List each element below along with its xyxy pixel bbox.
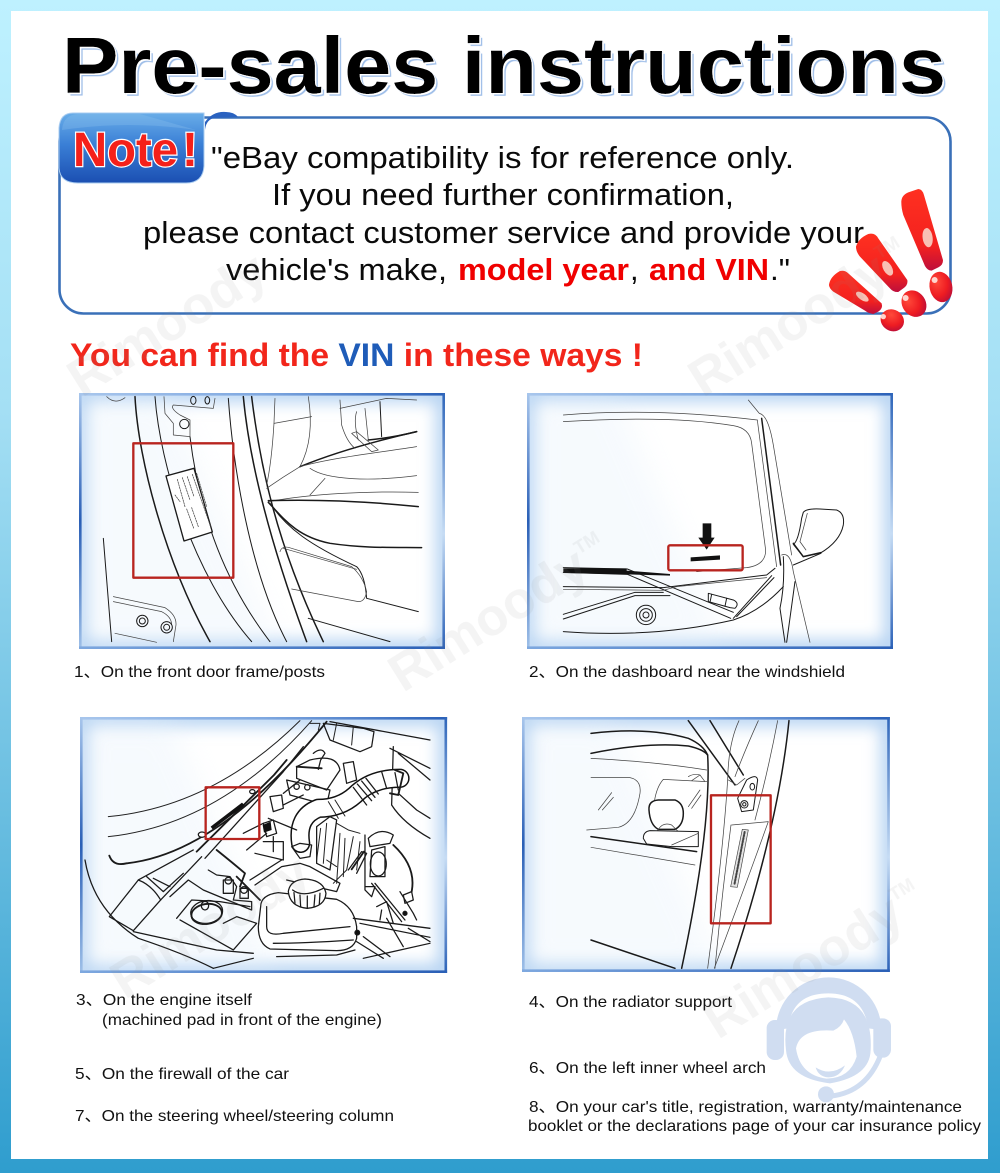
- line drawing: engine bay: [85, 721, 430, 968]
- note text: .": [770, 252, 790, 287]
- caption 8: booklet or the declarations page of your car insurance policy: [528, 1118, 981, 1135]
- watermarks: TM: [885, 874, 918, 905]
- panel: engine location: [80, 717, 447, 973]
- VIN strip: [731, 829, 748, 887]
- caption 3: [76, 992, 382, 1029]
- note text: please contact customer service and provide your: [143, 215, 864, 250]
- image frame: [522, 717, 890, 972]
- icon: customer service headset: [767, 977, 891, 1102]
- watermarks: Rimoody: [379, 536, 598, 703]
- caption 1: 1、On the front door frame/posts: [74, 664, 325, 681]
- note text: ,: [630, 252, 639, 287]
- watermarks: [58, 227, 935, 1050]
- panel: radiator support location: [522, 717, 890, 972]
- red highlight box: [206, 787, 259, 839]
- panel: dashboard location: [527, 393, 893, 649]
- round cap: [189, 899, 224, 925]
- image frame: [80, 717, 447, 973]
- intake hose: [300, 778, 400, 843]
- watermarks: Rimoody: [101, 843, 320, 1010]
- cables: [217, 850, 260, 900]
- note panel: [59, 112, 955, 336]
- pillar: [731, 721, 789, 968]
- caption 2: 2、On the dashboard near the windshield: [529, 664, 845, 681]
- arrow: [698, 523, 715, 550]
- image frame: [79, 393, 445, 649]
- watermarks: Rimoody: [58, 241, 277, 408]
- line drawing: door frame: [103, 396, 422, 642]
- red highlight box: [711, 795, 771, 923]
- line drawing: radiator support: [587, 721, 789, 968]
- note text: model year: [458, 252, 629, 287]
- hinge: [738, 777, 758, 812]
- note text: [143, 140, 864, 287]
- caption 8: [528, 1099, 981, 1135]
- red highlight box: [668, 545, 743, 570]
- title: Pre-sales instructions: [62, 21, 946, 110]
- caption 6: 6、On the left inner wheel arch: [529, 1060, 766, 1077]
- strut: [688, 721, 735, 785]
- caption 4: 4、On the radiator support: [529, 994, 733, 1011]
- note text: If you need further confirmation,: [272, 177, 734, 212]
- image frame: [527, 393, 893, 649]
- note text: and VIN: [649, 252, 769, 287]
- panel: door frame location: [79, 393, 445, 649]
- note badge: [59, 112, 238, 183]
- caption 8: 8、On your car's title, registration, warranty/maintenance: [529, 1099, 962, 1116]
- caption 7: 7、On the steering wheel/steering column: [75, 1108, 394, 1125]
- icon: red exclamation marks: [829, 189, 955, 336]
- VIN plate: [166, 468, 212, 541]
- note text: vehicle's make,: [226, 252, 447, 287]
- line drawing: windshield: [563, 400, 844, 642]
- note text: "eBay compatibility is for reference only.: [211, 140, 794, 175]
- watermarks: TM: [870, 232, 903, 263]
- caption 3: 3、On the engine itself: [76, 992, 253, 1009]
- caption 5: 5、On the firewall of the car: [75, 1066, 290, 1083]
- subheading: You can find the VIN in these ways !: [70, 337, 643, 373]
- red highlight box: [133, 443, 233, 578]
- caption 3: (machined pad in front of the engine): [102, 1012, 382, 1029]
- sensor cluster: [368, 832, 393, 877]
- dipstick and pipes: [352, 852, 364, 869]
- watermarks: Rimoody: [679, 241, 898, 408]
- watermarks: Rimoody: [694, 883, 913, 1050]
- note badge: !: [182, 124, 198, 177]
- note box outline: [60, 118, 950, 314]
- pad pins: [250, 790, 255, 794]
- reservoir: [258, 893, 357, 951]
- note badge: Note: [73, 124, 178, 177]
- bottle and cap: [297, 758, 340, 790]
- watermarks: TM: [570, 527, 603, 558]
- VIN plate mark: [691, 555, 720, 561]
- bracket plate: [211, 803, 245, 829]
